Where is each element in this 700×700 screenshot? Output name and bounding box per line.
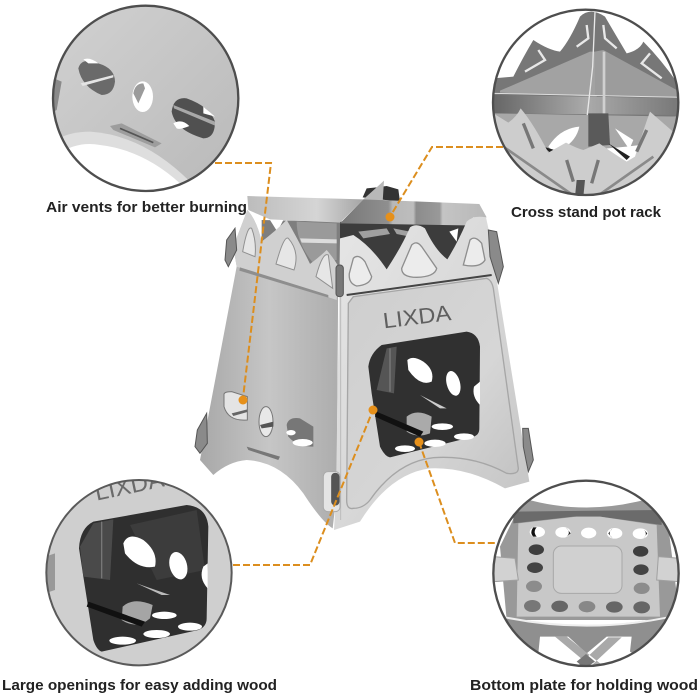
leader dot: bottom plate [414,438,424,446]
leader: pot rack [391,147,503,215]
label: air vents: Air vents for better burning [46,199,247,216]
circle detail: large openings [45,479,233,666]
center square [553,546,622,593]
leader: air vents [215,163,271,398]
label: large openings: Large openings for easy adding wood [2,677,277,694]
side vents [224,392,313,460]
plate [517,517,660,617]
leader dot: large openings [368,406,378,414]
left face [200,210,338,528]
leader dot: air vents [238,396,248,404]
stove product photo [195,181,533,530]
leader: large openings [233,410,373,565]
lower crown teeth [493,108,680,197]
crown triangles [349,238,485,286]
circle detail: cross stand pot rack [490,7,683,200]
slit [110,123,162,147]
hinges [195,228,533,512]
large front opening [368,332,480,457]
circle detail: bottom plate [490,480,683,670]
left panel crown [233,210,338,300]
vent hole middle [132,81,153,112]
top plate right [340,199,487,225]
vent hole left [78,61,115,95]
logo: LIXDA [382,300,453,333]
right panel inset [347,278,518,509]
opening [79,505,208,652]
interior behind the crown [340,220,473,272]
label: bottom plate: Bottom plate for holding wood [470,677,698,694]
vent hole right [172,98,215,138]
circle detail: large openings: LIXDA [92,465,167,506]
lower rim and legs [506,618,665,653]
right face [334,217,529,530]
leader dot: pot rack [386,212,394,222]
back tab [363,186,400,202]
arch rim and cutout [62,132,188,183]
top plate left [247,196,363,223]
label: pot rack: Cross stand pot rack [511,204,662,221]
leader: bottom plate [419,442,495,543]
holes [524,527,650,613]
circle detail: air vents [52,4,240,192]
